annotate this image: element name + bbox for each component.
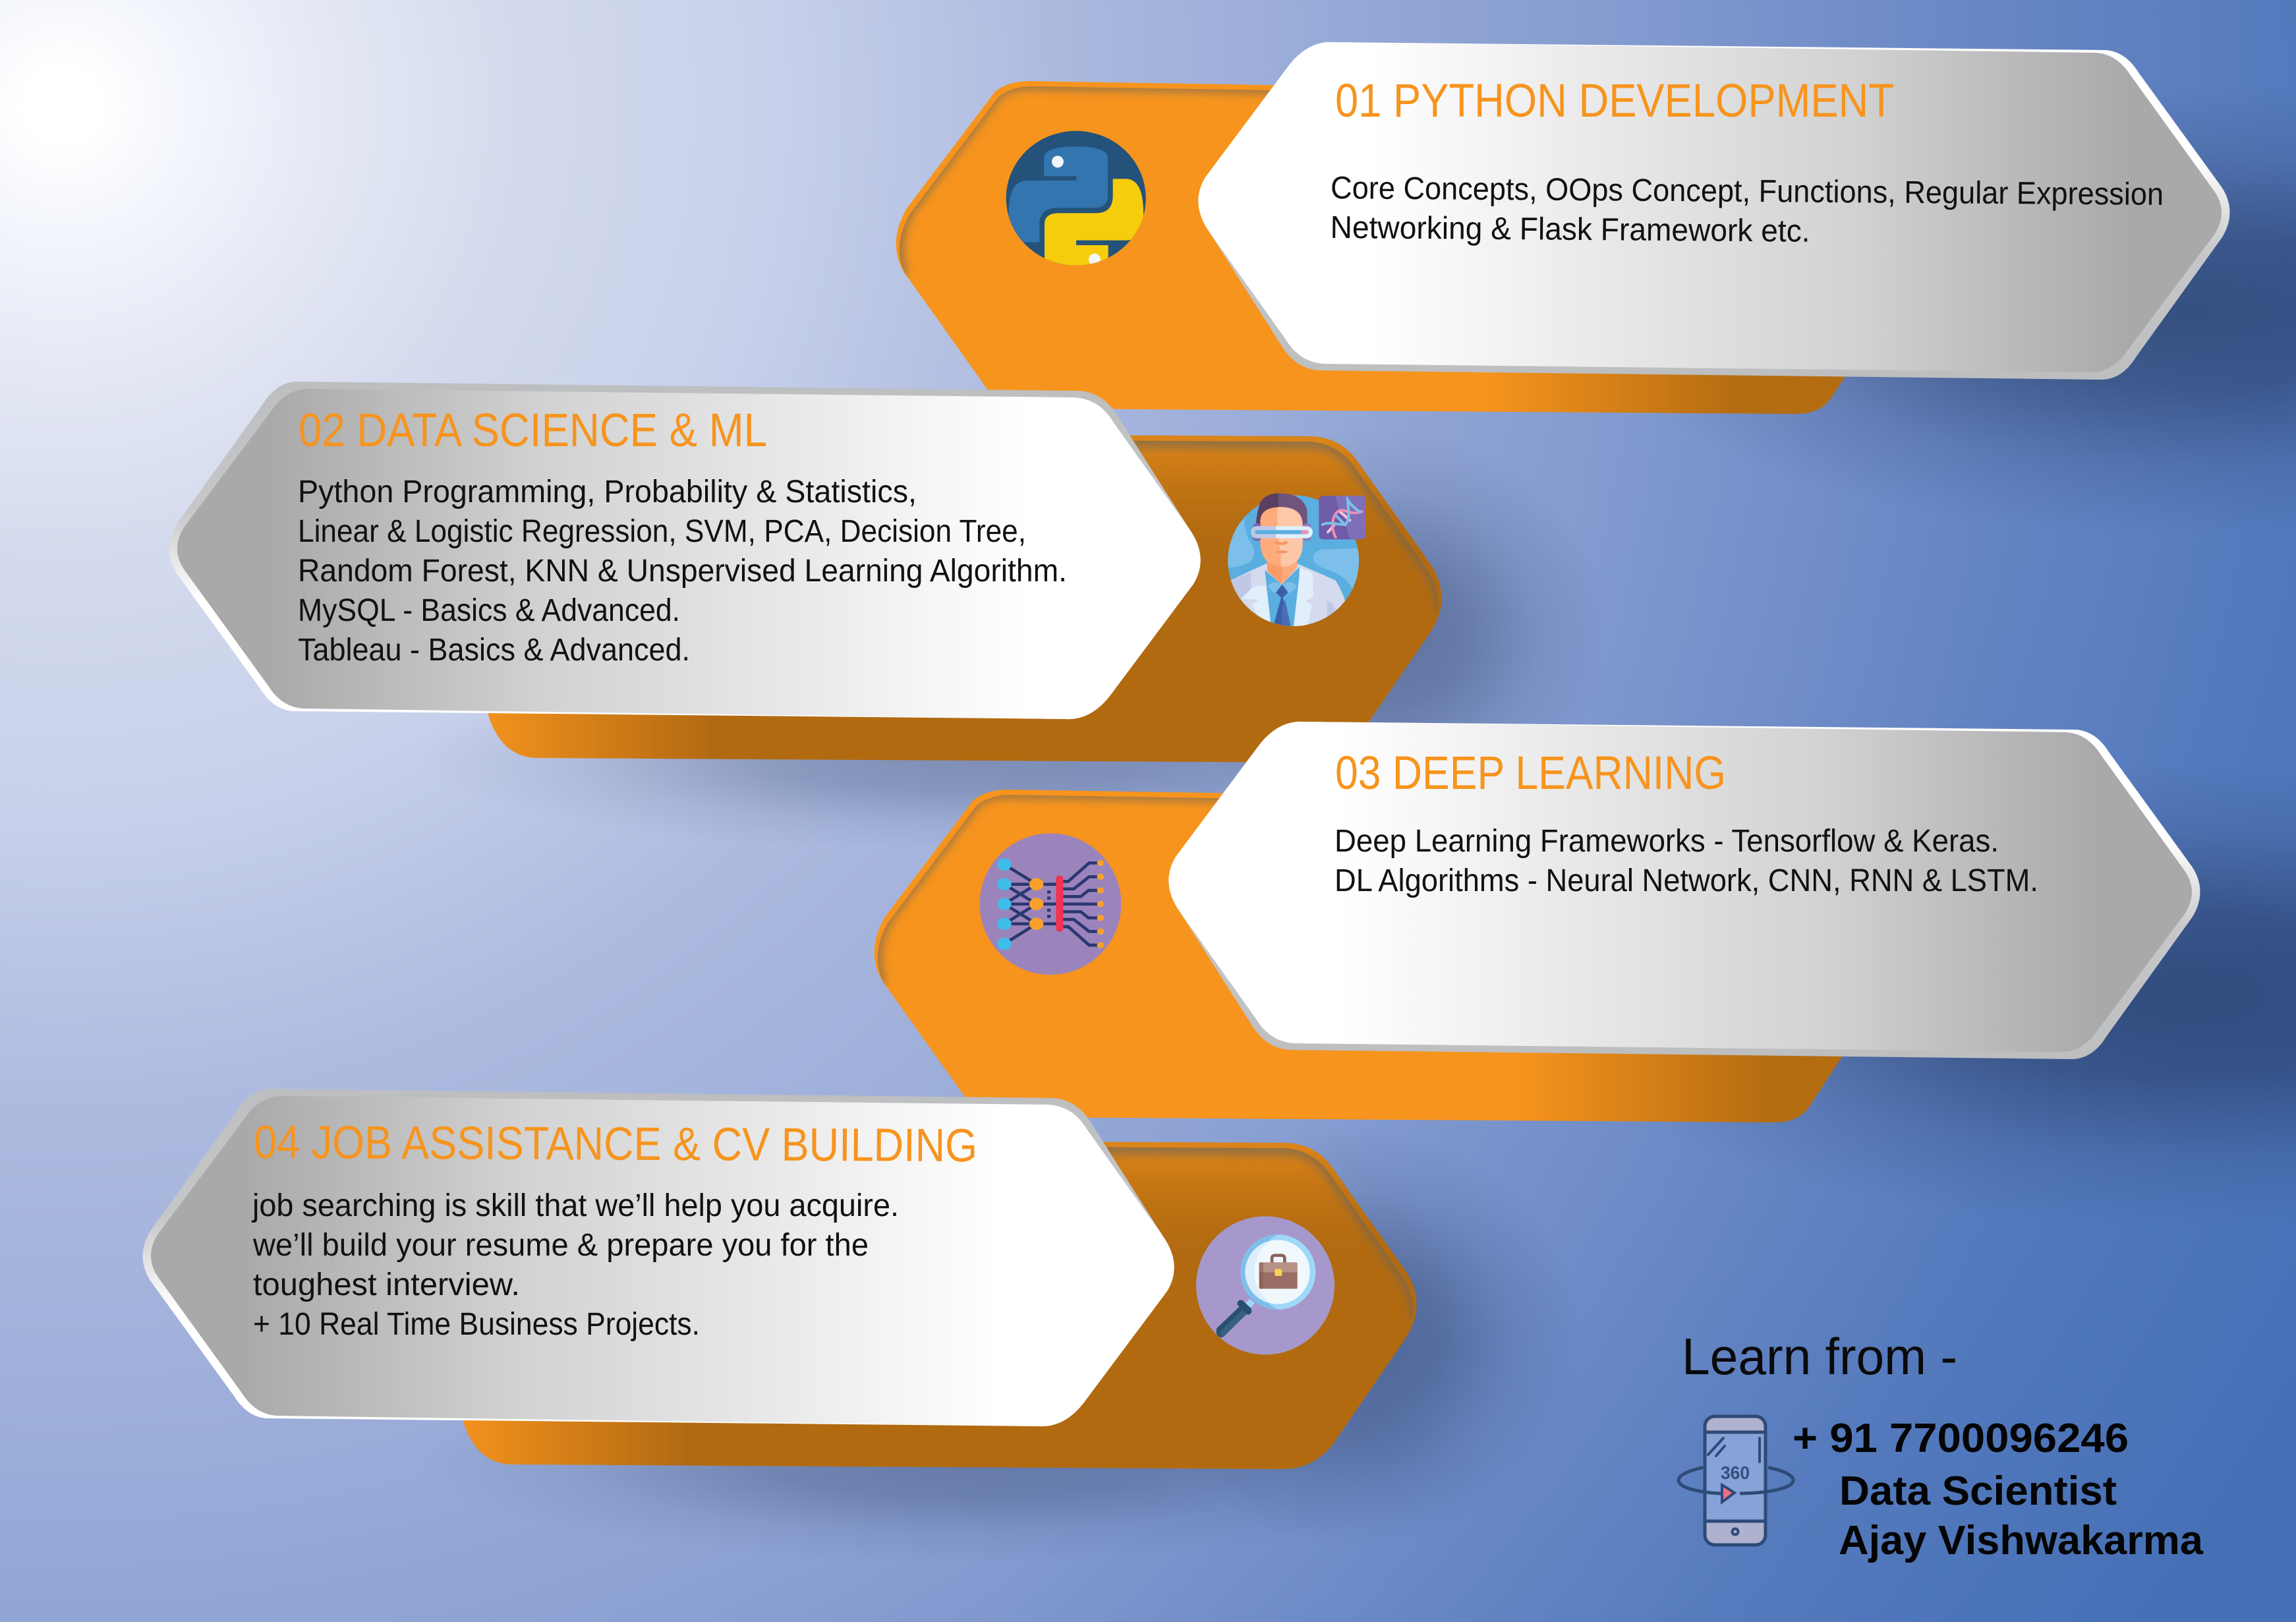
body text 04: + 10 Real Time Business Projects. — [253, 1307, 700, 1342]
body text 02: Linear & Logistic Regression, SVM, PCA, Decision Tree, — [298, 514, 1026, 549]
body text 02 — [298, 475, 1067, 668]
body text 01: Networking & Flask Framework etc. — [1330, 210, 1810, 249]
body text 04 — [251, 1188, 899, 1342]
white hexagon card 01 — [1198, 42, 2230, 380]
orange back plate 03 — [873, 790, 1863, 1122]
icon: neural network chip — [980, 833, 1121, 975]
icon: data scientist with visor — [1226, 493, 1365, 631]
heading 04: 04 JOB ASSISTANCE & CV BUILDING — [254, 1116, 977, 1172]
white hexagon card 02 — [169, 382, 1201, 719]
icon: 360 phone: 360 — [1721, 1463, 1750, 1483]
body text 01 — [1330, 171, 2164, 252]
learn from heading: Learn from - — [1682, 1327, 1957, 1385]
body text 02: Python Programming, Probability & Statistics, — [298, 475, 917, 509]
body text 02: Tableau - Basics & Advanced. — [298, 633, 690, 668]
heading 01: 01 PYTHON DEVELOPMENT — [1335, 75, 1894, 127]
orange back plate 01 — [895, 81, 1885, 414]
body text 03: DL Algorithms - Neural Network, CNN, RNN & LSTM. — [1335, 863, 2038, 898]
orange back plate 02 — [484, 435, 1445, 763]
body text 04: job searching is skill that we’ll help you acquire. — [251, 1188, 899, 1223]
body text 03 — [1335, 824, 2038, 898]
role: Data Scientist — [1839, 1468, 2117, 1514]
contact block — [1679, 1327, 2204, 1563]
name: Ajay Vishwakarma — [1839, 1518, 2204, 1563]
heading 02: 02 DATA SCIENCE & ML — [299, 405, 767, 457]
body text 04: toughest interview. — [253, 1267, 520, 1302]
body text 01: Core Concepts, OOps Concept, Functions, Regular Expression — [1331, 171, 2164, 212]
body text 04: we’ll build your resume & prepare you for the — [252, 1228, 869, 1263]
body text 02: Random Forest, KNN & Unspervised Learning Algorithm. — [298, 554, 1067, 589]
panel: 03 deep learning — [873, 722, 2200, 1122]
background shadows — [415, 86, 2296, 1562]
orange back plate 04 — [459, 1142, 1420, 1469]
icon: 360 phone — [1679, 1416, 1793, 1545]
body text 02: MySQL - Basics & Advanced. — [298, 593, 680, 628]
white hexagon card 03 — [1168, 722, 2200, 1059]
icon: magnifier over briefcase — [1196, 1216, 1335, 1354]
body text 03: Deep Learning Frameworks - Tensorflow & Keras. — [1335, 824, 1999, 859]
white hexagon card 04 — [142, 1089, 1174, 1426]
panel: 01 python development — [895, 42, 2230, 414]
panel: 02 data science and ml — [169, 382, 1445, 763]
icon: python logo — [1006, 131, 1146, 270]
heading 03: 03 DEEP LEARNING — [1335, 747, 1726, 799]
panel: 04 job assistance and cv building — [142, 1089, 1420, 1469]
phone number: + 91 7700096246 — [1793, 1416, 2129, 1461]
